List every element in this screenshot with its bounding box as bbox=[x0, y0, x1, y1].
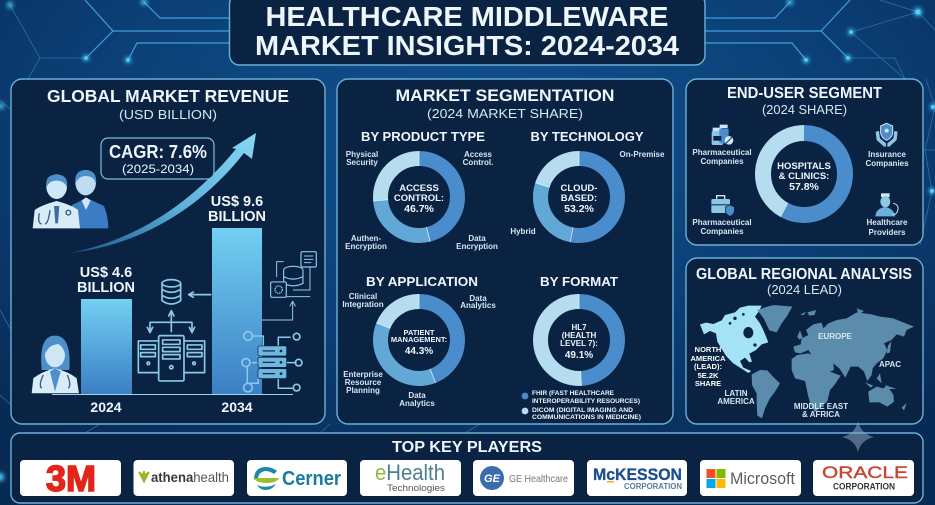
label: healthcare providers bbox=[867, 218, 908, 237]
label: north america: 5E.2K bbox=[698, 371, 719, 380]
label: pharmaceutical companies second bbox=[692, 218, 752, 236]
chart: by application: Integration bbox=[342, 300, 384, 309]
chart: by format: HL7 bbox=[571, 323, 587, 332]
heading: end-user segment: (2024 SHARE) bbox=[762, 102, 847, 117]
label: pharmaceutical companies second: Companies bbox=[700, 227, 744, 236]
chart: by application bbox=[342, 274, 496, 408]
value: 2024 bbox=[77, 265, 135, 296]
chart: by technology: CLOUD- bbox=[561, 183, 597, 194]
legend: format bbox=[522, 390, 641, 421]
chart: by technology bbox=[510, 129, 665, 242]
chart: by technology: On-Premise bbox=[620, 150, 665, 159]
heading: global market revenue: (USD BILLION) bbox=[119, 107, 217, 122]
chart: by product type: Encryption bbox=[345, 242, 387, 251]
chart: by application: MANAGEMENT: bbox=[391, 335, 447, 344]
value: 2034: US$ 9.6 bbox=[211, 194, 263, 210]
chart: by technology: BY TECHNOLOGY bbox=[530, 129, 644, 144]
icon: insurance shield in hands bbox=[876, 123, 898, 147]
chart: by format: LEVEL 7): bbox=[560, 339, 598, 348]
chart: by technology: BASED: bbox=[561, 193, 597, 204]
label: europe: EUROPE bbox=[818, 332, 853, 341]
heading: end-user segment: END-USER SEGMENT bbox=[727, 85, 883, 102]
logo: athenahealth: athenahealth bbox=[151, 469, 229, 485]
value: 2034 bbox=[208, 194, 266, 225]
icon: pharmaceutical bottles bbox=[712, 125, 733, 145]
label: latin america: AMERICA bbox=[717, 397, 755, 406]
chart: by application: Data bbox=[469, 294, 487, 303]
chart: by product type: Control. bbox=[463, 158, 493, 167]
logo: McKesson: McKESSON bbox=[593, 465, 682, 484]
chart: by format: 49.1% bbox=[565, 350, 593, 361]
axis label: 2024: 2024 bbox=[90, 399, 122, 415]
logo: GE Healthcare bbox=[473, 460, 574, 496]
value: 2034: BILLION bbox=[208, 209, 266, 225]
label: latin america bbox=[717, 389, 755, 406]
chart: by technology: 53.2% bbox=[564, 203, 595, 215]
heading: global regional analysis bbox=[696, 266, 912, 297]
chart: end-user donut bbox=[763, 133, 845, 215]
panel: global market revenue bbox=[11, 79, 325, 424]
value: 2024: BILLION bbox=[77, 280, 135, 296]
label: north america: AMERICA bbox=[690, 354, 726, 363]
chart: by technology: Hybrid bbox=[510, 227, 536, 236]
chart: by format: BY FORMAT bbox=[540, 274, 618, 289]
label: insurance companies bbox=[865, 150, 909, 168]
callout: CAGR: (2025-2034) bbox=[122, 164, 194, 176]
chart: by product type: ACCESS bbox=[399, 183, 439, 194]
chart: by product type: CONTROL: bbox=[394, 193, 444, 204]
legend: format: FHIR (FAST HEALTHCARE bbox=[532, 390, 615, 397]
panel: market segmentation bbox=[337, 79, 673, 424]
bar chart bbox=[52, 194, 293, 415]
label: insurance companies: Companies bbox=[865, 159, 909, 168]
legend: format: DICOM (DIGITAL IMAGING AND bbox=[532, 407, 633, 414]
callout: CAGR: CAGR: 7.6% bbox=[109, 142, 207, 162]
callout: CAGR bbox=[101, 138, 214, 179]
logo: eHealth Technologies: Technologies bbox=[387, 483, 446, 493]
heading: end-user segment bbox=[727, 85, 883, 117]
logo: eHealth Technologies bbox=[360, 460, 461, 496]
icon: sparkle watermark bbox=[842, 421, 874, 452]
chart: by format: (HEALTH bbox=[562, 331, 596, 340]
heading: market segmentation: (2024 MARKET SHARE) bbox=[427, 106, 583, 121]
heading: global regional analysis: (2024 LEAD) bbox=[767, 282, 842, 297]
heading: global regional analysis: GLOBAL REGIONAL ANALYSIS bbox=[696, 266, 912, 283]
logo: Cerner bbox=[247, 460, 347, 496]
chart: by application: Analytics bbox=[460, 301, 496, 310]
icon: server network bbox=[242, 332, 302, 392]
chart: by application: Enterprise bbox=[343, 370, 383, 379]
label: north america bbox=[690, 345, 726, 388]
panel: global regional analysis bbox=[686, 258, 923, 424]
chart: by product type: Physical bbox=[346, 150, 378, 159]
chart: by format bbox=[540, 274, 618, 386]
logo: 3M: 3M bbox=[46, 458, 96, 499]
label: healthcare providers: Providers bbox=[869, 228, 906, 237]
chart: by product type: Access bbox=[464, 150, 493, 159]
label: middle east and africa: MIDDLE EAST bbox=[794, 402, 848, 411]
logo: Microsoft bbox=[700, 460, 801, 496]
world map bbox=[700, 305, 914, 418]
bar: 2024 bbox=[81, 299, 132, 394]
chart: by application: BY APPLICATION bbox=[366, 274, 478, 289]
chart: by application: Planning bbox=[346, 386, 380, 395]
logo: Cerner: Cerner bbox=[282, 468, 341, 490]
logo: McKesson: CORPORATION bbox=[624, 482, 682, 491]
heading: global market revenue bbox=[47, 86, 289, 122]
logo: 3M bbox=[20, 458, 121, 499]
label: healthcare providers: Healthcare bbox=[867, 218, 908, 227]
logo: Microsoft: Microsoft bbox=[730, 469, 795, 488]
label: latin america: LATIN bbox=[725, 389, 748, 398]
icon: female doctor bbox=[32, 336, 79, 393]
legend: format: INTEROPERABILITY RESOURCES) bbox=[532, 398, 640, 405]
label: apac: APAC bbox=[879, 360, 901, 369]
icon: database with servers bbox=[138, 280, 211, 381]
chart: by application: PATIENT bbox=[404, 328, 435, 337]
label: pharmaceutical companies bbox=[692, 148, 752, 166]
icon: two doctors bbox=[33, 170, 108, 228]
chart: by product type: 46.7% bbox=[404, 203, 435, 215]
region: north america bbox=[700, 306, 768, 373]
heading: market segmentation: MARKET SEGMENTATION bbox=[396, 87, 614, 105]
label: north america: NORTH bbox=[695, 345, 721, 354]
chart: by product type: Authen- bbox=[351, 234, 381, 243]
panel: end-user segment bbox=[686, 79, 923, 245]
logo: Oracle bbox=[813, 460, 914, 496]
icon: briefcase with shield bbox=[711, 196, 734, 216]
arrow: growth trend bbox=[70, 133, 256, 253]
logo: Oracle: CORPORATION bbox=[833, 482, 895, 492]
title bbox=[230, 0, 705, 65]
title: HEALTHCARE MIDDLEWARE bbox=[266, 1, 668, 32]
chart: by application: Analytics bbox=[399, 399, 435, 408]
title: MARKET INSIGHTS: 2024-2034 bbox=[255, 30, 679, 61]
icon: healthcare nurse bbox=[875, 193, 898, 216]
icon: cloud data node bbox=[262, 252, 316, 320]
legend: format: COMMUNICATIONS IN MEDICINE) bbox=[532, 414, 641, 421]
label: middle east and africa: & AFRICA bbox=[802, 410, 840, 419]
chart: by application: Data bbox=[408, 391, 426, 400]
label: north america: (LEAD): bbox=[694, 362, 722, 371]
label: pharmaceutical companies second: Pharmaceutical bbox=[692, 218, 752, 227]
chart: by product type bbox=[345, 129, 498, 251]
chart: by product type: Data bbox=[468, 234, 486, 243]
logo: eHealth Technologies: eHealth bbox=[375, 460, 445, 485]
heading: global market revenue: GLOBAL MARKET REVENUE bbox=[47, 86, 289, 106]
label: pharmaceutical companies: Pharmaceutical bbox=[692, 148, 752, 157]
label: middle east and africa bbox=[794, 402, 848, 419]
bar: 2034 bbox=[212, 228, 262, 394]
logo: GE Healthcare: GE Healthcare bbox=[509, 473, 568, 485]
heading: top key players: TOP KEY PLAYERS bbox=[392, 439, 542, 456]
chart: by application: 44.3% bbox=[405, 346, 433, 357]
panel: top key players bbox=[11, 433, 923, 503]
chart: end-user donut: 57.8% bbox=[789, 181, 820, 193]
logo: McKesson bbox=[587, 460, 687, 496]
chart: by application: Resource bbox=[345, 378, 382, 387]
chart: by application: Clinical bbox=[349, 292, 377, 301]
heading: market segmentation bbox=[396, 87, 614, 121]
logo: GE Healthcare: GE bbox=[484, 473, 501, 485]
chart: by product type: Encryption bbox=[456, 242, 498, 251]
chart: end-user donut: HOSPITALS bbox=[777, 161, 831, 172]
chart: by product type: Security bbox=[346, 158, 378, 167]
label: insurance companies: Insurance bbox=[868, 150, 906, 159]
label: pharmaceutical companies: Companies bbox=[700, 157, 744, 166]
value: 2024: US$ 4.6 bbox=[80, 265, 132, 281]
region: rest of world bbox=[752, 305, 914, 418]
chart: end-user donut: & CLINICS: bbox=[779, 171, 829, 182]
label: north america: SHARE bbox=[695, 379, 721, 388]
logo: athenahealth bbox=[134, 460, 234, 496]
axis label: 2034: 2034 bbox=[221, 399, 253, 415]
logo: Oracle: ORACLE bbox=[822, 463, 908, 482]
chart: by product type: BY PRODUCT TYPE bbox=[361, 129, 485, 144]
